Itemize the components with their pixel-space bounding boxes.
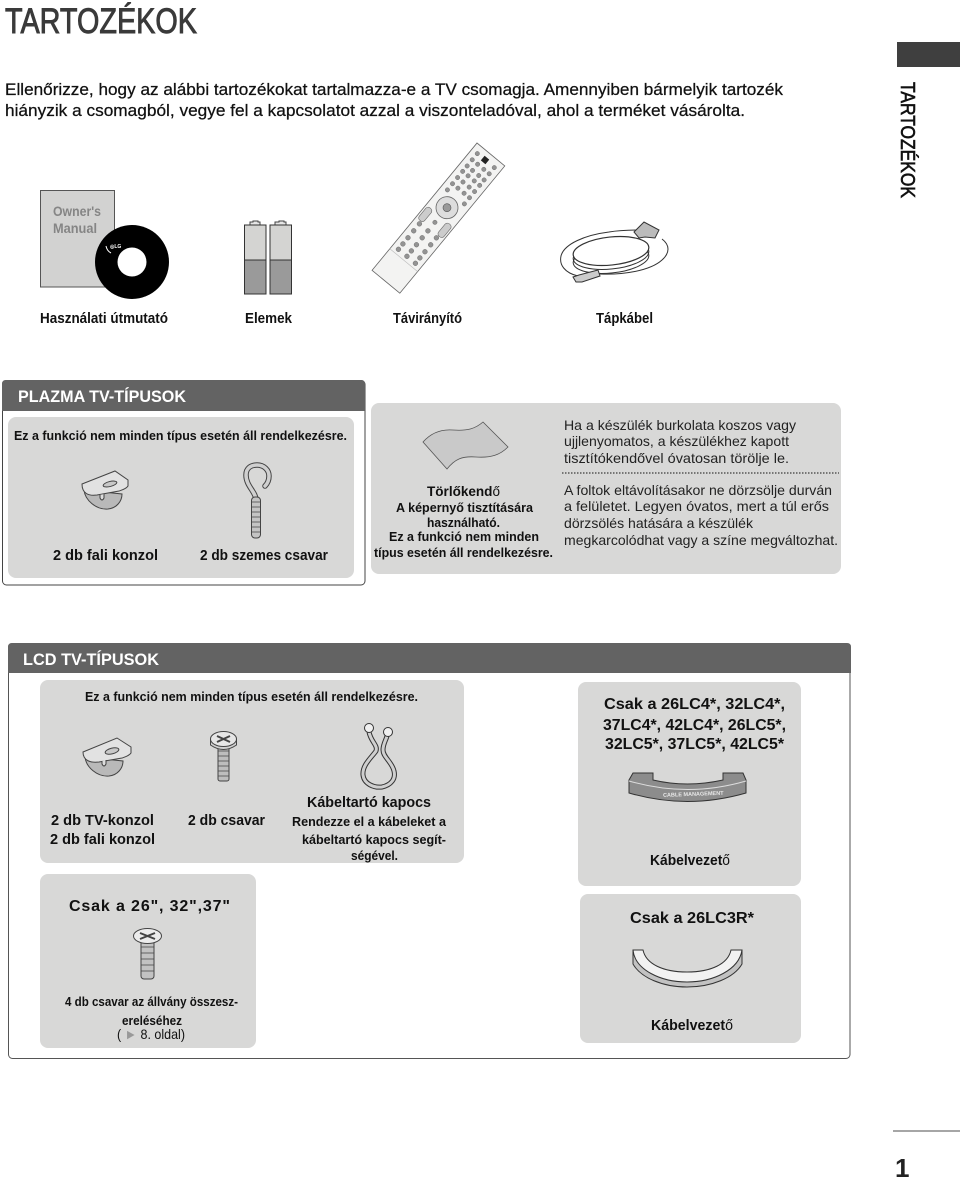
side label: TARTOZÉKOK: [896, 82, 919, 199]
plasma inner panel: [8, 417, 354, 578]
size note: Csak a 26", 32",37": [69, 898, 230, 915]
screw caption: [65, 994, 238, 1042]
intro text: [5, 80, 783, 120]
cloth caption: használható.: [427, 515, 500, 530]
guide label: Kábelvezető: [650, 852, 730, 869]
cleaning instructions: Ha a készülék burkolata koszos vagy: [564, 417, 796, 433]
icon: power cable: [561, 222, 668, 282]
icon: bracket: [83, 738, 131, 776]
cleaning instructions: ujjlenyomatos, a készülékhez kapott: [564, 433, 789, 449]
plasma header bar: [2, 380, 365, 411]
scratch warning: a felületet. Legyen óvatos, mert a túl erős: [564, 498, 829, 514]
item labels: 2 db fali konzol: [53, 547, 158, 564]
icon: manual and CD: [40, 190, 169, 299]
scratch warning: [564, 482, 838, 548]
page number rule: [893, 1130, 960, 1132]
cloth caption: A képernyő tisztítására: [396, 500, 534, 515]
item labels: ségével.: [351, 848, 398, 863]
model list: Csak a 26LC4*, 32LC4*,: [604, 696, 785, 713]
labels: accessory names: Tápkábel: [596, 310, 653, 327]
side tab: [897, 42, 960, 67]
labels: accessory names: [40, 310, 653, 327]
icon: cable guide: CABLE MANAGEMENT: [663, 791, 724, 799]
icon: eye screw: [246, 465, 269, 538]
icon: batteries: [244, 221, 292, 294]
cloth caption: Ez a funkció nem minden: [389, 529, 539, 544]
model list: 32LC5*, 37LC5*, 42LC5*: [605, 736, 785, 753]
icon: cable clip: [363, 724, 394, 787]
item labels: [50, 794, 447, 863]
labels: accessory names: Elemek: [245, 310, 293, 327]
intro text: hiányzik a csomagból, vegye fel a kapcsolatot azzal a viszonteladóval, ahol a terméket vásárolta.: [5, 101, 745, 120]
labels: accessory names: Távirányító: [393, 310, 462, 327]
item labels: 2 db csavar: [188, 812, 265, 829]
icon: manual and CD: Owner's: [53, 203, 101, 219]
item labels: 2 db fali konzol: [50, 831, 155, 848]
screw caption: ereléséhez: [122, 1013, 182, 1028]
model list: 37LC4*, 42LC4*, 26LC5*,: [603, 717, 786, 734]
LCD header bar: [8, 643, 851, 673]
cleaning instructions: [564, 417, 796, 466]
panel: cable guide for LC4/LC5: [578, 682, 801, 886]
model list: [603, 696, 786, 753]
availability note: Ez a funkció nem minden típus esetén áll rendelkezésre.: [85, 689, 418, 704]
cloth caption: típus esetén áll rendelkezésre.: [374, 545, 553, 560]
item labels: Rendezze el a kábeleket a: [292, 814, 447, 829]
icon: cloth: [423, 422, 508, 469]
screw caption: ( ► 8. oldal): [117, 1026, 185, 1042]
panel: plasma TV types: 2 db szemes csavar: [200, 547, 328, 564]
LCD accessories panel: [40, 680, 464, 863]
panel: LCD TV types: [8, 643, 851, 1058]
icon: wall bracket: [82, 471, 128, 509]
icon: manual and CD: ◎LG: [110, 244, 121, 250]
icon: remote control: [372, 143, 505, 293]
cloth caption: [374, 483, 553, 560]
panel: plasma TV types: [2, 380, 365, 585]
intro text: Ellenőrizze, hogy az alábbi tartozékokat tartalmazza-e a TV csomagja. Amennyiben bármelyik tartozék: [5, 80, 783, 99]
icon: curved guide: [633, 950, 742, 987]
panel: cleaning cloth: [371, 403, 841, 574]
scratch warning: megkarcolódhat vagy a színe megváltozhat.: [564, 532, 838, 548]
cloth caption: Törlőkendő: [427, 483, 500, 499]
item labels: 2 db TV-konzol: [51, 812, 154, 829]
LCD heading: LCD TV-TÍPUSOK: [23, 650, 160, 669]
model note: Csak a 26LC3R*: [630, 910, 755, 927]
title: TARTOZÉKOK: [5, 2, 197, 41]
icon: manual and CD: Manual: [53, 220, 97, 236]
item labels: kábeltartó kapocs segít-: [302, 832, 446, 847]
plasma heading: PLAZMA TV-TÍPUSOK: [18, 387, 187, 406]
plasma availability note: Ez a funkció nem minden típus esetén áll rendelkezésre.: [14, 428, 347, 443]
panel: cable guide for 26LC3R: [580, 894, 801, 1043]
screw caption: 4 db csavar az állvány összesz-: [65, 994, 238, 1009]
cleaning instructions: tisztítókendővel óvatosan törölje le.: [564, 450, 789, 466]
icon: screw: [210, 732, 236, 781]
labels: accessory names: Használati útmutató: [40, 310, 168, 327]
scratch warning: dörzsölés hatására a készülék: [564, 515, 754, 531]
guide label: Kábelvezető: [651, 1017, 733, 1034]
scratch warning: A foltok eltávolításakor ne dörzsölje durván: [564, 482, 832, 498]
panel: 26/32/37 inch screws: [40, 874, 256, 1048]
icon: countersunk screw: [134, 928, 162, 979]
icon: cable guide: [629, 773, 746, 802]
item labels: Kábeltartó kapocs: [307, 794, 431, 811]
